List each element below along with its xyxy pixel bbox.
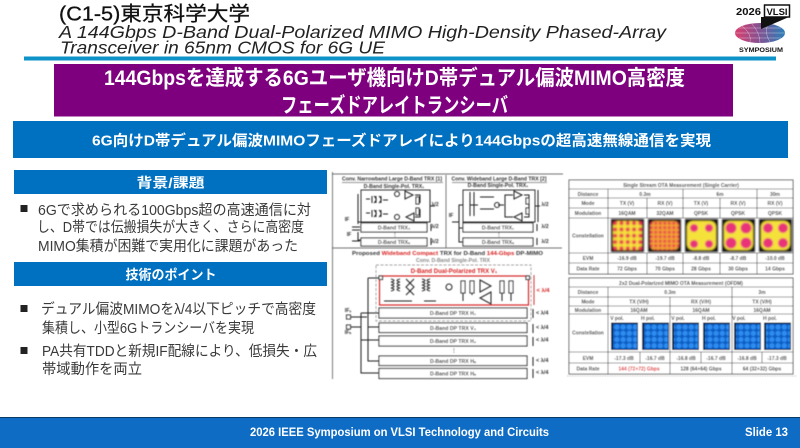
- title: university: (C1-5)東京科学大学: [59, 2, 250, 26]
- circuit: conventional narrowband: IF: [347, 232, 351, 238]
- constellation images: OFDM: V pol.: [732, 316, 746, 322]
- table: dual-polarized MIMO OTA measurement: 144 (72+72) Gbps: [618, 366, 660, 372]
- table: single stream OTA measurement: QPSK: [768, 211, 782, 217]
- table: single stream OTA measurement: -19.7 dB: [655, 256, 675, 262]
- circuit: conventional wideband: IF: [449, 213, 453, 219]
- title divider rule: [24, 56, 776, 60]
- circuit: conventional wideband: λ/2: [541, 239, 549, 245]
- panel: technical points: [14, 262, 327, 378]
- circuit: conventional wideband: D-Band Single-Pol. TRX₁: [468, 183, 528, 189]
- circuit: conventional wideband: λ/2: [541, 224, 549, 230]
- table: dual-polarized MIMO OTA measurement: EVM: [583, 356, 593, 362]
- banner: summary: [13, 121, 788, 158]
- panel: background and challenges: [14, 170, 327, 255]
- title: paper name: A 144Gbps D-Band Dual-Polarized MIMO High-Density Phased-Array: [58, 22, 667, 42]
- constellation images: OFDM: V pol.: [671, 316, 685, 322]
- circuit: proposed dual-polarized array: ⋮: [451, 347, 457, 354]
- row: TRX V2: D-Band DP TRX V₂: [430, 326, 477, 332]
- circuit: proposed dual-polarized array: < λ/4: [536, 370, 549, 376]
- row: TRX H1: [379, 308, 527, 318]
- footer bar: Slide 13: [745, 427, 788, 439]
- row: TRX VN: D-Band DP TRX Hₙ: [430, 359, 476, 365]
- table: single stream OTA measurement: 72 Gbps: [617, 266, 637, 272]
- heading: technical points: 技術のポイント: [126, 266, 216, 282]
- table: dual-polarized MIMO OTA measurement: Mode: [581, 300, 595, 306]
- table: single stream OTA measurement: Modulation: [575, 211, 601, 217]
- table: dual-polarized MIMO OTA measurement: TX (V/H): [752, 300, 772, 306]
- table: single stream OTA measurement: 28 Gbps: [691, 266, 711, 272]
- table: single stream OTA measurement: 70 Gbps: [655, 266, 675, 272]
- circuit: conventional narrowband: [342, 176, 443, 246]
- table: single stream OTA measurement: EVM: [583, 256, 593, 262]
- icon: VLSI symposium logo: 2026: [736, 6, 761, 18]
- circuit: conventional narrowband: D-Band Single-Pol. TRX₁: [364, 184, 424, 190]
- circuit: conventional wideband: ⋮: [496, 231, 502, 238]
- row: TRX H2: [379, 336, 527, 346]
- table: single stream OTA measurement: TX (V): [620, 201, 635, 207]
- table: single stream OTA measurement: RX (V): [658, 201, 673, 207]
- heading: background: 背景/課題: [136, 174, 205, 190]
- circuit: proposed dual-polarized array: < λ/4: [536, 310, 549, 316]
- table: single stream OTA measurement: 32QAM: [656, 211, 674, 217]
- table: dual-polarized MIMO OTA measurement: Data Rate: [576, 366, 600, 372]
- text block: point one: デュアル偏波MIMOをλ/4以下ピッチで高密度: [41, 300, 316, 318]
- text block: point one: 集積し、小型6Gトランシーバを実現: [42, 320, 254, 337]
- table: single stream OTA measurement: RX (V): [768, 201, 783, 207]
- table: single stream OTA measurement: Single Stream OTA Measurement (Single Carrier): [623, 183, 739, 189]
- circuit: proposed dual-polarized array: Conv. D-Band Single-Pol. TRX: [416, 258, 491, 264]
- row: TRX HN: [379, 368, 527, 378]
- circuit: proposed dual-polarized array: D-Band Dual-Polarized TRX V₁: [411, 269, 498, 275]
- table: dual-polarized MIMO OTA measurement: 2x2 Dual-Polarized MIMO OTA Measurement (OFDM): [619, 281, 743, 287]
- table: dual-polarized MIMO OTA measurement: Constellation: [572, 330, 604, 336]
- circuit: proposed dual-polarized array: IFₕ: [345, 330, 351, 336]
- circuit: conventional wideband: D-Band TRX₁: [482, 226, 514, 232]
- table: single stream OTA measurement: -10.0 dB: [765, 256, 785, 262]
- table: dual-polarized MIMO OTA measurement: Distance: [578, 290, 599, 296]
- constellation images: OFDM: [610, 316, 791, 350]
- row: TRX V2: [379, 323, 527, 332]
- circuit: conventional narrowband: D-Band TRX₂: [378, 226, 411, 232]
- table: dual-polarized MIMO OTA measurement: 16QAM: [630, 308, 648, 314]
- footer bar: 2026 IEEE Symposium on VLSI Technology and Circuits: [250, 427, 549, 439]
- table: single stream OTA measurement: Distance: [578, 192, 599, 198]
- table: single stream OTA measurement: -8.8 dB: [693, 256, 710, 262]
- table: single stream OTA measurement: [569, 180, 793, 274]
- text block: background: 6Gで求められる100Gbps超の高速通信に対: [38, 202, 311, 219]
- circuit: proposed dual-polarized array: < λ/4: [536, 288, 550, 294]
- circuit: conventional narrowband: IF: [345, 217, 349, 223]
- circuit heading: proposed: Proposed Wideband Compact TRX for D-Band 144-Gbps DP-MIMO: [352, 251, 544, 257]
- constellation images: OFDM: H pol.: [763, 316, 778, 322]
- constellation images: OFDM: V pol.: [610, 316, 624, 322]
- circuit: conventional wideband: λ/2: [541, 202, 549, 208]
- banner: summary: 6G向けD帯デュアル偏波MIMOフェーズドアレイにより144Gbpsの超高速無線通信を実現: [92, 132, 711, 150]
- text block: point one: [20, 300, 316, 337]
- banner: main headline: [54, 64, 733, 118]
- row: TRX HN: D-Band DP TRX Hₙ: [430, 372, 476, 378]
- row: TRX H1: D-Band DP TRX H₁: [430, 311, 476, 317]
- table: dual-polarized MIMO OTA measurement: 16QAM: [692, 308, 710, 314]
- heading: background: [14, 170, 327, 194]
- circuit: proposed dual-polarized array: < λ/4: [536, 338, 549, 344]
- table: dual-polarized MIMO OTA measurement: -16.8 dB: [737, 356, 757, 362]
- table: single stream OTA measurement: -16.9 dB: [617, 256, 637, 262]
- table: dual-polarized MIMO OTA measurement: -17.3 dB: [614, 356, 634, 362]
- banner: main headline: 144Gbpsを達成する6Gユーザ機向けD帯デュアル偏波MIMO高密度: [104, 66, 685, 90]
- row: TRX VN: [379, 356, 527, 366]
- table: dual-polarized MIMO OTA measurement: TX (V/H): [629, 300, 649, 306]
- circuit: conventional narrowband: ⋮: [392, 231, 398, 238]
- icon: VLSI symposium logo: VLSI: [766, 7, 788, 18]
- table: dual-polarized MIMO OTA measurement: -16.8 dB: [676, 356, 696, 362]
- table: dual-polarized MIMO OTA measurement: 16QAM: [753, 308, 771, 314]
- table: single stream OTA measurement: 0.3m: [639, 192, 651, 198]
- table: dual-polarized MIMO OTA measurement: -16.7 dB: [645, 356, 665, 362]
- footer bar: [0, 417, 800, 448]
- table: single stream OTA measurement: 16QAM: [618, 211, 636, 217]
- table: single stream OTA measurement: RX (V): [730, 201, 746, 207]
- chart: circuit architecture diagram: [332, 172, 563, 379]
- circuit: proposed dual-polarized array: < λ/4: [536, 358, 549, 364]
- table: dual-polarized MIMO OTA measurement: 64 (32+32) Gbps: [743, 366, 781, 372]
- circuit: conventional narrowband: D-Band TRXₙ: [378, 240, 410, 246]
- table: single stream OTA measurement: Constellation: [572, 234, 604, 240]
- table: dual-polarized MIMO OTA measurement: 128 (64+64) Gbps: [680, 366, 722, 372]
- table: single stream OTA measurement: QPSK: [694, 211, 708, 217]
- table: dual-polarized MIMO OTA measurement: 3m: [758, 290, 766, 296]
- circuit: proposed dual-polarized array: [345, 258, 550, 378]
- constellation images: OFDM: H pol.: [641, 316, 656, 322]
- circuit: conventional narrowband: λ/2: [431, 224, 439, 230]
- table: dual-polarized MIMO OTA measurement: [567, 278, 797, 376]
- circuit: conventional narrowband: Conv. Narrowband Large D-Band TRX [1]: [342, 176, 442, 182]
- table: single stream OTA measurement: -8.7 dB: [730, 256, 747, 262]
- table: dual-polarized MIMO OTA measurement: -17.3 dB: [767, 356, 787, 362]
- circuit: conventional wideband: D-Band TRXₙ: [482, 240, 514, 246]
- text block: point two: [20, 343, 317, 378]
- banner: main headline: フェーズドアレイトランシーバ: [281, 94, 508, 118]
- circuit: proposed dual-polarized array: IFᵥ: [345, 308, 351, 314]
- table: single stream OTA measurement: 14 Gbps: [765, 266, 785, 272]
- text block: point two: 帯域動作を両立: [42, 361, 142, 378]
- table: single stream OTA measurement: Mode: [581, 201, 595, 207]
- heading: technical points: [14, 262, 327, 286]
- title: paper name: Transceiver in 65nm CMOS for 6G UE: [60, 38, 385, 58]
- row: TRX H2: D-Band DP TRX H₂: [430, 339, 477, 345]
- icon: VLSI symposium logo: [735, 5, 790, 54]
- table: single stream OTA measurement: 6m: [716, 192, 724, 198]
- circuit: conventional narrowband: λ/2: [431, 239, 439, 245]
- text block: background: [20, 202, 311, 255]
- text block: background: し、D帯では伝搬損失が大きく、さらに高密度: [37, 219, 304, 236]
- table: dual-polarized MIMO OTA measurement: -16.7 dB: [706, 356, 726, 362]
- circuit: conventional wideband: Conv. Wideband Large D-Band TRX [2]: [452, 176, 547, 182]
- title: paper name: [58, 22, 667, 58]
- circuit: proposed dual-polarized array: < λ/4: [536, 325, 549, 331]
- constellation images: single carrier: [611, 219, 792, 252]
- table: dual-polarized MIMO OTA measurement: Modulation: [575, 308, 601, 314]
- table: dual-polarized MIMO OTA measurement: 0.3m: [664, 290, 676, 296]
- table: single stream OTA measurement: Data Rate: [576, 266, 600, 272]
- circuit: conventional wideband: [449, 176, 549, 246]
- table: single stream OTA measurement: 30m: [770, 192, 781, 198]
- constellation images: OFDM: H pol.: [702, 316, 717, 322]
- table: single stream OTA measurement: TX (V): [694, 201, 709, 207]
- table: single stream OTA measurement: 30 Gbps: [728, 266, 748, 272]
- text block: background: MIMO集積が困難で実用化に課題があった: [38, 238, 298, 255]
- circuit: conventional narrowband: λ/2: [431, 202, 439, 208]
- icon: VLSI symposium logo: SYMPOSIUM: [739, 47, 783, 54]
- table: dual-polarized MIMO OTA measurement: RX (V/H): [691, 300, 711, 306]
- table: single stream OTA measurement: QPSK: [731, 211, 745, 217]
- text block: point two: PA共有TDDと新規IF配線により、低損失・広: [42, 343, 317, 360]
